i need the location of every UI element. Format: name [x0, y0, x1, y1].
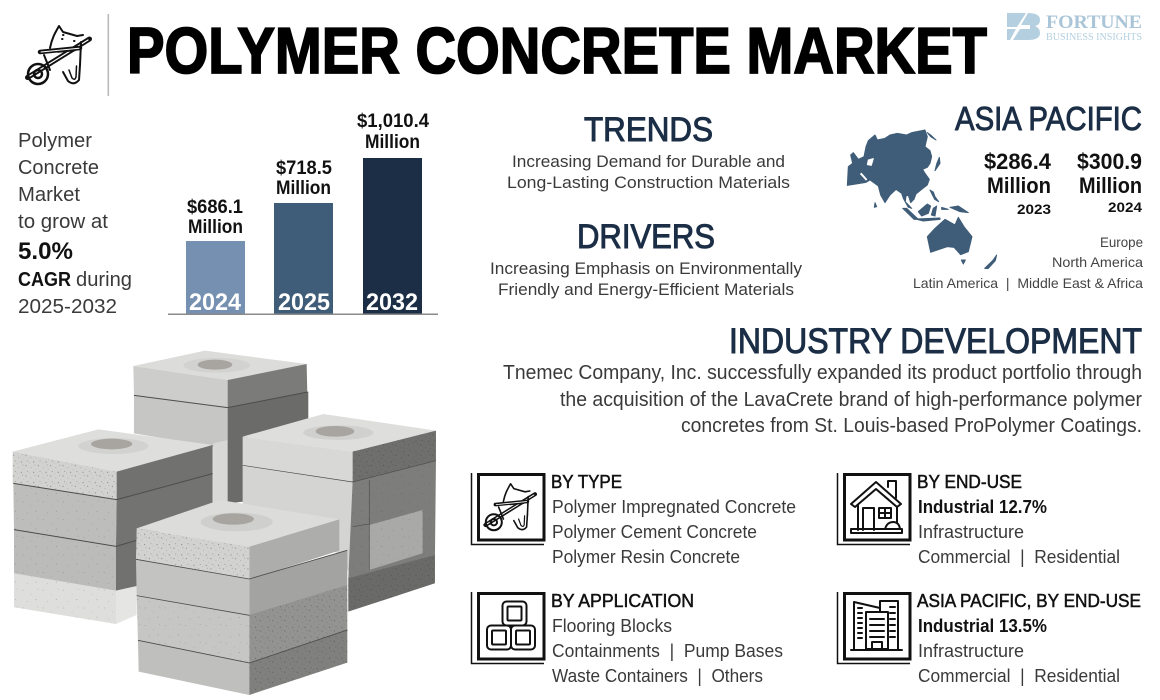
segment: by type: [472, 472, 796, 567]
bar 2032: Million: [365, 132, 420, 153]
text block: CAGR summary: during: [76, 269, 132, 291]
panel: trends: TRENDS: [584, 111, 713, 149]
panel: trends: Increasing Demand for Durable and: [512, 152, 785, 171]
panel: trends: Long-Lasting Construction Materials: [507, 173, 790, 192]
segment: Asia Pacific by end-use: Commercial | Residential: [918, 666, 1120, 686]
segment: by type: BY TYPE: [551, 472, 622, 492]
panel: trends: [507, 111, 790, 192]
panel: Asia Pacific values: 2023: [1017, 201, 1051, 217]
panel: industry development: the acquisition of the LavaCrete brand of high-performance polymer: [560, 389, 1142, 411]
panel: drivers: Increasing Emphasis on Environmentally: [490, 259, 802, 278]
text block: CAGR summary: Polymer: [18, 130, 92, 152]
segment: by end-use: Industrial 12.7%: [918, 497, 1047, 517]
panel: industry development: concretes from St. Louis-based ProPolymer Coatings.: [681, 415, 1142, 437]
icon: house box: [838, 473, 910, 544]
panel: industry development: Tnemec Company, Inc. successfully expanded its product portfolio through: [503, 362, 1142, 384]
bar 2024: Million: [188, 217, 243, 238]
icon: wheelbarrow header: [28, 26, 90, 84]
text block: other regions: North America: [1052, 254, 1143, 270]
panel: Asia Pacific values: 2024: [1108, 199, 1142, 215]
block: left: [13, 429, 213, 624]
segment: Asia Pacific by end-use: ASIA PACIFIC, BY END-USE: [917, 591, 1141, 611]
segment: by application: Containments | Pump Bases: [552, 641, 783, 661]
segment: Asia Pacific by end-use: [838, 591, 1141, 686]
panel: Asia Pacific values: ASIA PACIFIC: [955, 100, 1142, 137]
block: back: [133, 351, 308, 503]
panel: drivers: [490, 218, 802, 299]
panel: drivers: DRIVERS: [577, 218, 715, 256]
text block: other regions: Europe: [1100, 234, 1143, 250]
bar 2032: $1,010.4: [357, 111, 429, 132]
text block: CAGR summary: to grow at: [18, 211, 108, 233]
segment: by application: [472, 591, 783, 686]
map: Asia Pacific: [847, 130, 997, 269]
segment: by type: Polymer Impregnated Concrete: [552, 497, 796, 517]
segment: by end-use: Infrastructure: [918, 522, 1024, 542]
panel: Asia Pacific values: [955, 100, 1142, 217]
segment: Asia Pacific by end-use: Industrial 13.5%: [918, 616, 1047, 636]
bar 2032: [357, 111, 429, 316]
text block: other regions: Latin America | Middle East & Africa: [913, 275, 1143, 291]
segment: by end-use: Commercial | Residential: [918, 547, 1120, 567]
icon: blocks box: [472, 592, 544, 664]
panel: drivers: Friendly and Energy-Efficient Materials: [498, 280, 794, 299]
segment: by application: BY APPLICATION: [551, 591, 694, 611]
bar 2024: [186, 197, 245, 316]
text block: CAGR summary: Market: [18, 184, 80, 206]
text block: CAGR summary: CAGR: [18, 269, 71, 291]
bar 2025: $718.5: [276, 158, 332, 179]
text block: other regions: [913, 234, 1143, 291]
divider: [108, 14, 109, 96]
bar 2025: 2025: [278, 289, 330, 316]
bar 2025: Million: [276, 178, 331, 199]
segment: by end-use: BY END-USE: [917, 472, 1022, 492]
text block: CAGR summary: 5.0%: [18, 238, 73, 265]
panel: industry development: [503, 322, 1142, 437]
image: concrete blocks: [13, 351, 436, 695]
bar 2032: 2032: [366, 289, 418, 316]
text block: CAGR summary: Concrete: [18, 157, 99, 179]
text block: CAGR summary: [18, 130, 132, 318]
panel: Asia Pacific values: $300.9: [1077, 149, 1142, 174]
icon: buildings box: [838, 592, 910, 664]
logo: Fortune Business Insights: [1007, 12, 1142, 43]
segment: by application: Waste Containers | Others: [552, 666, 763, 686]
segment: by application: Flooring Blocks: [552, 616, 672, 636]
bar 2024: 2024: [189, 289, 242, 316]
segment: by type: Polymer Cement Concrete: [552, 522, 757, 542]
segment: by end-use: [838, 472, 1120, 567]
text block: CAGR summary: 2025-2032: [18, 296, 117, 318]
segment: by type: Polymer Resin Concrete: [552, 547, 740, 567]
block: right: [243, 414, 436, 612]
logo: Fortune Business Insights: FORTUNE: [1046, 12, 1142, 33]
block: front: [136, 500, 347, 695]
logo: Fortune Business Insights: BUSINESS INSIGHTS: [1046, 32, 1142, 43]
panel: Asia Pacific values: Million: [987, 173, 1051, 198]
icon: wheelbarrow box: [472, 473, 544, 544]
panel: Asia Pacific values: Million: [1079, 173, 1142, 198]
bar 2025: [274, 158, 333, 316]
title: POLYMER CONCRETE MARKET: [127, 14, 987, 87]
panel: Asia Pacific values: $286.4: [984, 149, 1052, 174]
bar chart: [168, 111, 438, 316]
bar 2024: $686.1: [187, 197, 243, 218]
segment: Asia Pacific by end-use: Infrastructure: [918, 641, 1024, 661]
